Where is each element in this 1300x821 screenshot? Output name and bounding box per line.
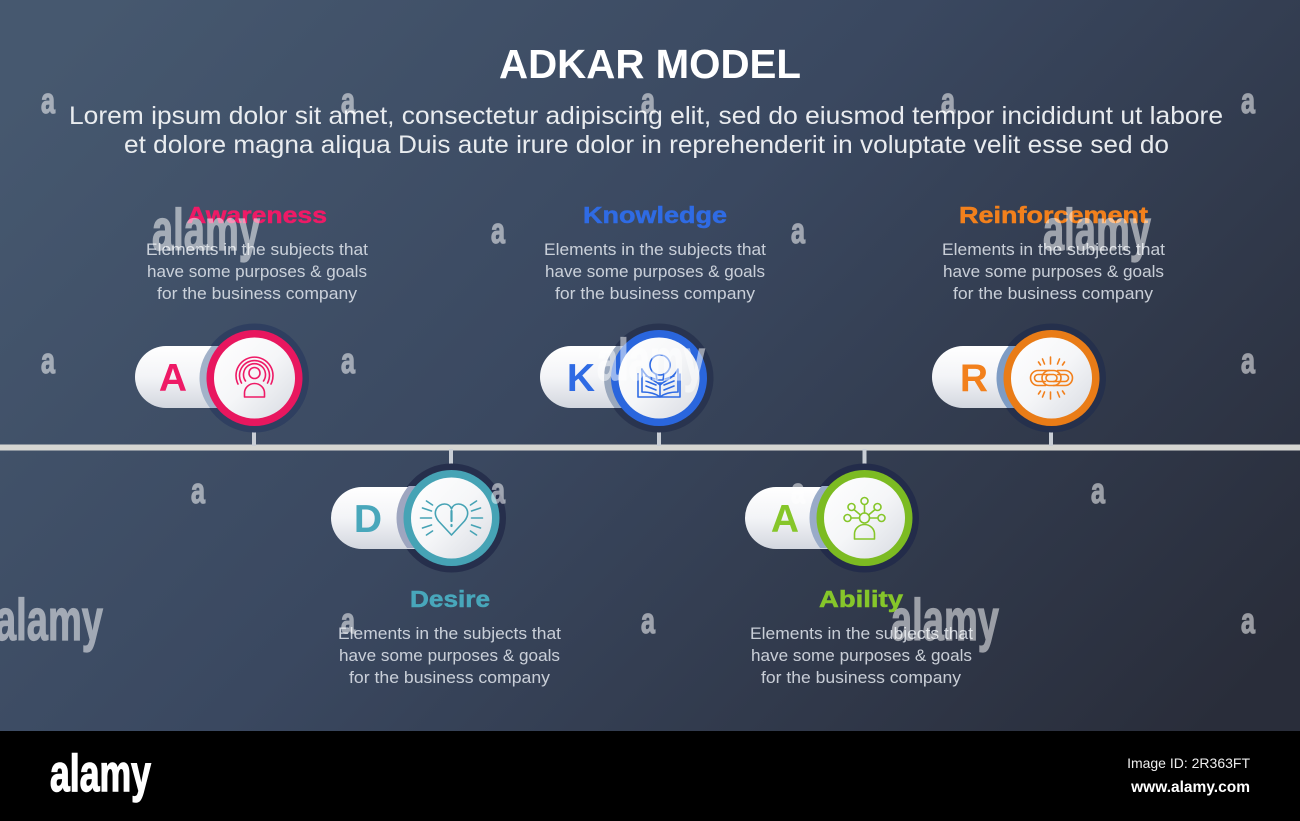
badge halo [810,464,919,572]
pill with letter D: D [354,498,382,541]
text block: Knowledge description: for the business company [555,284,756,303]
heading: Ability: Ability [819,586,903,612]
heading: Knowledge: Knowledge [583,202,727,228]
pill with letter D [331,487,451,549]
watermark overlay: a [1241,80,1256,121]
watermark overlay: alamy [1043,198,1151,263]
intro paragraph: et dolore magna aliqua Duis aute irure dolor in reprehenderit in voluptate velit esse sed do [124,131,1169,159]
pill with letter A: A [159,357,187,400]
pill with letter R [932,346,1052,408]
watermark overlay: a [641,600,656,641]
pill with letter K: K [567,357,595,400]
connector stem [252,426,256,446]
text block: Desire description: Elements in the subjects that [338,624,561,643]
text block: Ability description [750,624,973,687]
pill with letter K [540,346,660,408]
watermark overlay [0,80,1256,653]
text block: Desire description: have some purposes & goals [339,646,560,665]
text block: Awareness description: Elements in the subjects that [146,240,368,259]
text block: Ability description: have some purposes & goals [751,646,972,665]
pill with letter R: R [960,357,988,400]
watermark overlay: a [491,210,506,251]
icon: chain link [1030,357,1072,399]
text block: Reinforcement description: for the business company [953,284,1154,303]
badge halo [604,324,714,432]
connector stem [862,449,866,471]
icon: book with light bulb [638,355,680,397]
footer bar [0,731,1300,821]
text block: Desire description [338,624,561,687]
text block: Ability description: Elements in the subjects that [750,624,973,643]
connector stem [1049,426,1053,446]
watermark overlay: a [41,340,56,381]
text block: Knowledge description [544,240,766,303]
icon: person with network nodes [844,498,885,539]
watermark overlay: a [341,340,356,381]
text block: Ability description: for the business company [761,668,962,687]
footer logo: alamy [50,745,151,803]
badge: Reinforcement [996,330,1100,426]
step: Knowledge [540,202,766,446]
watermark overlay: a [1091,470,1106,511]
badge: Desire [396,470,500,566]
intro paragraph: Lorem ipsum dolor sit amet, consectetur adipiscing elit, sed do eiusmod tempor incididunt ut labore [69,102,1223,130]
text block: Reinforcement description: have some purposes & goals [943,262,1164,281]
icon: broadcasting person [236,357,273,397]
watermark overlay: a [791,470,806,511]
pill with letter A [745,487,865,549]
text block: Knowledge description: Elements in the subjects that [544,240,766,259]
watermark overlay: a [1241,340,1256,381]
heading: Desire: Desire [410,586,490,612]
title: ADKAR MODEL [499,41,801,87]
text block: Awareness description [146,240,368,303]
image id: Image ID: 2R363FT [1127,755,1250,771]
text block: Awareness description: for the business company [157,284,358,303]
watermark overlay: a [191,470,206,511]
timeline line [0,444,1300,450]
watermark overlay: a [41,80,56,121]
icon: heart with rays [420,501,482,535]
text block: Awareness description: have some purposes & goals [147,262,367,281]
step: Awareness [135,202,368,446]
step: Desire [331,449,561,687]
pill with letter A [135,346,255,408]
badge: Knowledge [604,330,707,426]
badge halo [397,464,506,572]
badge: Awareness [200,330,302,426]
watermark overlay: a [491,470,506,511]
step: Reinforcement [932,202,1165,446]
badge halo [997,324,1106,432]
watermark overlay: a [641,80,656,121]
text block: Reinforcement description [942,240,1165,303]
pill with letter A: A [771,498,799,541]
badge halo [200,324,309,432]
watermark overlay: a [791,210,806,251]
connector stem [657,426,661,446]
heading: Reinforcement: Reinforcement [959,202,1148,228]
watermark overlay: a [941,80,956,121]
website: www.alamy.com [1130,779,1250,796]
heading: Awareness: Awareness [187,202,327,228]
watermark overlay: a [341,600,356,641]
step: Ability [745,449,973,687]
text block: Reinforcement description: Elements in the subjects that [942,240,1165,259]
watermark overlay: a [341,80,356,121]
watermark overlay: alamy [891,588,999,653]
connector stem [449,449,453,471]
watermark overlay: a [1241,600,1256,641]
text block: Knowledge description: have some purposes & goals [545,262,765,281]
badge: Ability [810,470,912,566]
watermark overlay: alamy [152,198,260,263]
text block: Desire description: for the business company [349,668,551,687]
watermark overlay: alamy [597,328,705,393]
intro paragraph [69,102,1223,159]
